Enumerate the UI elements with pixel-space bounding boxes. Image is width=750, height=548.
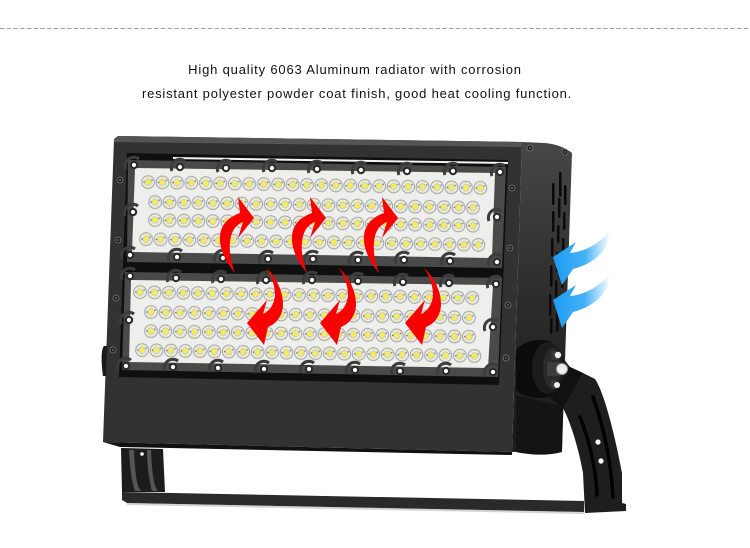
heading text: High quality 6063 Aluminum radiator with corrosion — [188, 62, 522, 77]
LED row 3 — [148, 212, 480, 234]
LED row 4 — [135, 342, 482, 364]
mounting bar and left leg — [121, 448, 584, 514]
LED row 4 — [139, 231, 486, 253]
side panel — [512, 142, 572, 452]
left hinge bump — [102, 346, 107, 376]
floodlight fixture — [102, 136, 626, 514]
bottom LED module — [117, 268, 502, 377]
hinge knuckle — [516, 340, 568, 398]
LED row 2 — [148, 194, 480, 216]
frame screws — [110, 145, 568, 449]
red heat arrows descending — [247, 268, 441, 345]
lower hinge housing — [516, 395, 563, 455]
LED row 2 — [144, 304, 476, 326]
red heat arrows rising — [220, 197, 398, 273]
frame opening — [119, 153, 508, 385]
module mounts — [121, 157, 505, 266]
side vents — [549, 172, 566, 334]
adjustable bracket — [550, 358, 626, 513]
dashed divider — [0, 28, 750, 30]
blue airflow arrows — [553, 232, 609, 328]
module mounts — [117, 268, 501, 376]
heading text — [142, 62, 572, 101]
LED row 1 — [141, 174, 488, 196]
LED row 3 — [144, 323, 476, 345]
front frame — [103, 136, 522, 452]
top LED module — [121, 157, 506, 268]
heading text: resistant polyester powder coat finish, good heat cooling function. — [142, 86, 572, 101]
LED row 1 — [133, 284, 480, 306]
